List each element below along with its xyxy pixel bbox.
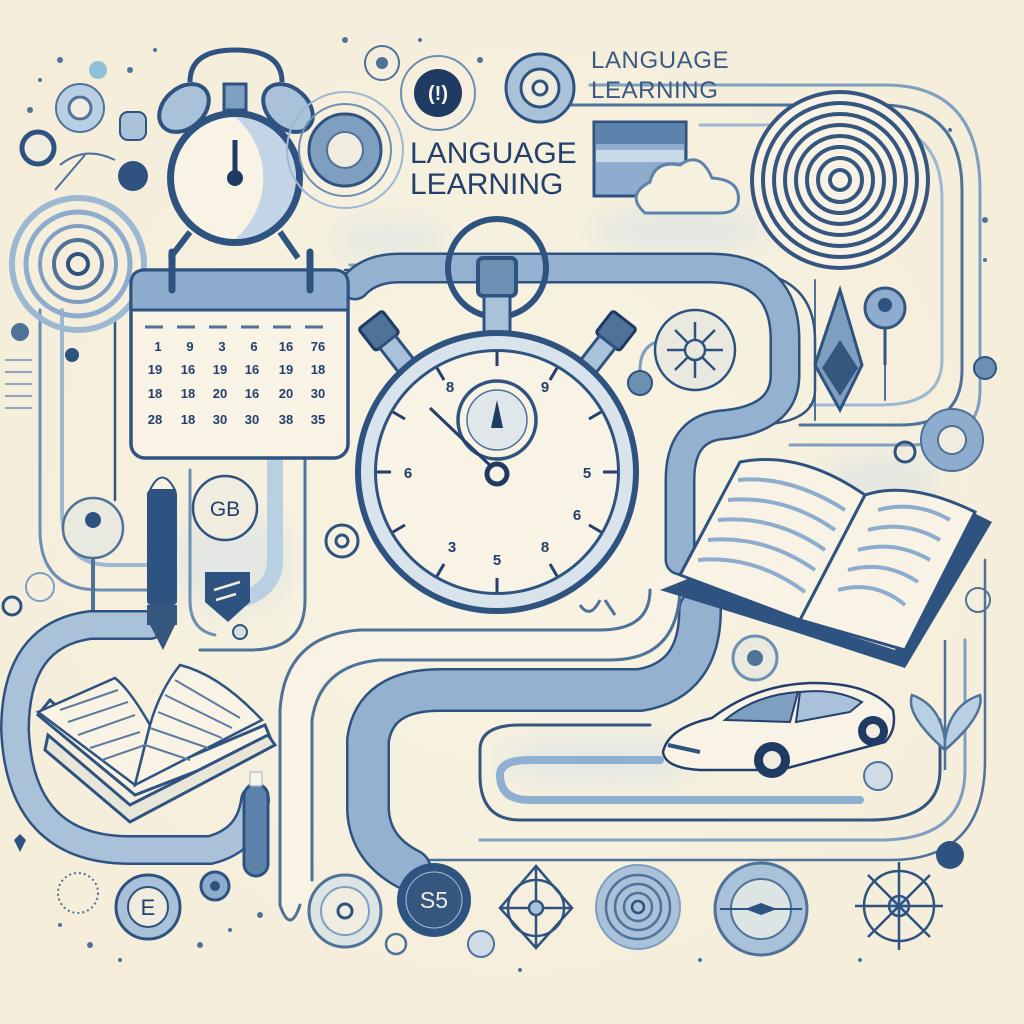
icon: landscape picture (594, 122, 686, 196)
background road lines (40, 85, 985, 860)
icon: calendar: 19 (148, 362, 162, 377)
icon: compass star (500, 866, 572, 948)
icon: concentric circles (287, 92, 403, 208)
icon: calendar: 16 (279, 339, 293, 354)
icon: calendar: 3 (218, 339, 226, 354)
icon: pendant diamond (815, 288, 905, 410)
icon: calendar: 30 (245, 412, 259, 427)
icon: spiral badge (596, 865, 680, 949)
icon: number badge: GB (210, 498, 240, 521)
icon: calendar: 18 (311, 362, 325, 377)
icon: left target (12, 198, 144, 330)
icon: stopwatch (355, 219, 639, 614)
icon: calendar: 19 (213, 362, 227, 377)
icon: exclamation badge (401, 56, 475, 130)
icon: right circles (895, 357, 996, 471)
icon: spiral target (752, 92, 928, 268)
icon: cloud (636, 160, 738, 213)
icon: wheel (655, 310, 735, 390)
main title: LEARNING (410, 168, 563, 201)
icon: number badge (193, 476, 257, 540)
icon: open book left (38, 665, 275, 822)
icon: capsule (244, 772, 268, 876)
icon: alarm clock (150, 50, 322, 258)
icon: stopwatch: 8 (541, 539, 549, 556)
icon: calendar: 18 (181, 412, 195, 427)
icon: at badge (506, 54, 574, 122)
icon: calendar: 16 (181, 362, 195, 377)
icon: number badge dark (397, 863, 471, 937)
bottom icon row (58, 841, 964, 957)
icon: E badge (116, 875, 180, 939)
icon: calendar: 76 (311, 339, 325, 354)
icon: stopwatch: 9 (541, 379, 549, 396)
icon: calendar: 1 (154, 339, 162, 354)
icon: helm wheel (855, 862, 943, 950)
icon: small ring (326, 525, 358, 557)
icon: flag badge (205, 572, 250, 622)
icon: calendar: 18 (148, 386, 162, 401)
icon: calendar: 20 (213, 386, 227, 401)
icon: calendar: 9 (186, 339, 194, 354)
icon: calendar: 19 (279, 362, 293, 377)
icon: calendar: 20 (279, 386, 293, 401)
small upper left icons (22, 46, 399, 191)
icon: stopwatch: 5 (583, 465, 591, 482)
icon: pin left (63, 498, 123, 610)
icon: stopwatch: 5 (493, 552, 501, 569)
icon: compass badge (715, 863, 807, 955)
icon: stopwatch: 6 (573, 507, 581, 524)
mid small icons (3, 323, 990, 852)
icon: calendar: 30 (213, 412, 227, 427)
main title: LANGUAGE (410, 137, 577, 170)
small title (591, 47, 729, 104)
icon: number badge dark: S5 (420, 887, 448, 913)
icon: ring badge (309, 875, 381, 947)
icon: dotted ring (58, 873, 98, 913)
icon: calendar: 38 (279, 412, 293, 427)
icon: calendar: 16 (245, 386, 259, 401)
icon: calendar: 16 (245, 362, 259, 377)
icon: calendar: 6 (250, 339, 258, 354)
icon: calendar (131, 252, 348, 458)
icon: calendar: 30 (311, 386, 325, 401)
icon: car (663, 683, 894, 778)
icon: calendar: 18 (181, 386, 195, 401)
icon: open book right (660, 459, 992, 668)
icon: exclamation badge: (!) (428, 83, 448, 105)
icon: pencil (147, 478, 177, 650)
icon: small rings (386, 841, 964, 957)
icon: stopwatch: 3 (448, 539, 456, 556)
background tint patches (170, 208, 940, 784)
icon: small dark ring (201, 872, 229, 900)
small title: LANGUAGE (591, 47, 729, 74)
icon: stopwatch: 6 (404, 465, 412, 482)
icon: calendar: 35 (311, 412, 325, 427)
icon: leaf (911, 640, 981, 770)
icon: E badge: E (141, 895, 155, 920)
icon: stopwatch: 8 (446, 379, 454, 396)
small title: LEARNING (591, 77, 718, 104)
winding blue road upper (355, 268, 785, 560)
road around left book (15, 625, 255, 850)
icon: calendar: 28 (148, 412, 162, 427)
winding blue road lower (280, 585, 700, 920)
main title (410, 137, 577, 201)
